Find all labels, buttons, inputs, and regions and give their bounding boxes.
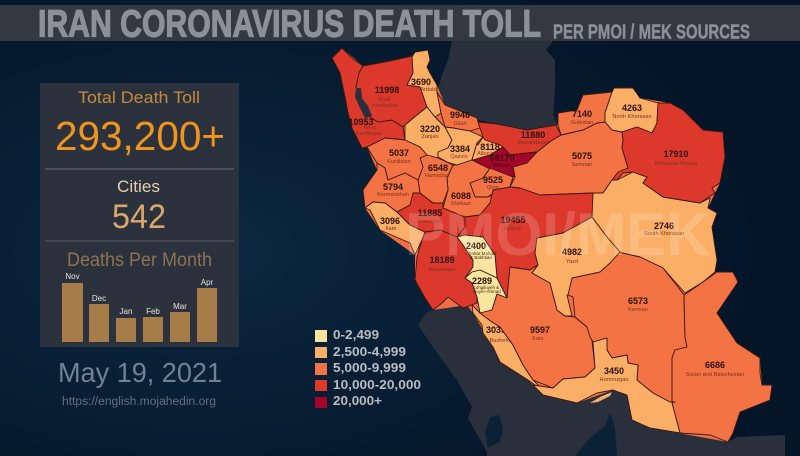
province: South Khorasan <box>592 172 717 293</box>
province: Alborz: Alborz <box>477 151 493 157</box>
province: Semnan: 5075 <box>572 151 592 161</box>
province: Gilan: 9946 <box>450 110 470 120</box>
legend item: 10,000-20,000: 10,000-20,000 <box>333 378 421 392</box>
legend item: 5,000-9,999: 5,000-9,999 <box>333 361 406 375</box>
province: Fars <box>480 265 595 388</box>
province: South Khorasan: 2746 <box>654 221 674 231</box>
Caspian Sea <box>437 41 558 130</box>
province: Khorasan Razavi <box>612 103 725 203</box>
province: Lorestan: Lorestan <box>419 219 441 225</box>
province: Kohgiluyeh and Boyer-Ahmad: Kohgiluyeh & <box>473 285 499 290</box>
province: Kohgiluyeh and Boyer-Ahmad: 2289 <box>472 276 492 286</box>
province: Ardabil: 3690 <box>411 77 431 87</box>
province: Hormozgan: Hormozgan <box>600 377 628 383</box>
province: Semnan <box>510 122 628 195</box>
bar chart: deaths per month: Feb <box>146 307 160 316</box>
province: Hormozgan <box>533 338 680 433</box>
province: Khorasan Razavi: Khorasan Razavi <box>655 161 697 167</box>
province: West Azerbaijan: 10953 <box>348 117 374 127</box>
province: Kerman: Kerman <box>628 307 648 313</box>
panel: statistics <box>40 83 239 347</box>
Persian Gulf and Gulf of Oman <box>418 305 785 456</box>
legend <box>315 328 421 408</box>
province: Lorestan: 11885 <box>418 208 442 218</box>
bar chart: deaths per month: Jan <box>120 307 132 316</box>
province: Kurdistan: 5037 <box>389 148 409 158</box>
province: Ilam: Ilam <box>386 226 397 232</box>
bar chart: deaths per month: Mar <box>173 302 187 311</box>
province: Qom <box>470 168 513 197</box>
province: Qom: Qom <box>487 185 499 191</box>
province: Isfahan: Isfahan <box>504 226 522 232</box>
province: Hamadan <box>418 155 453 203</box>
province: East Azerbaijan: East <box>379 97 391 103</box>
province: Golestan: Golestan <box>571 120 593 126</box>
province: Zanjan: Zanjan <box>421 134 439 140</box>
province: Ilam: 3096 <box>380 216 400 226</box>
province: East Azerbaijan: 11998 <box>375 85 399 95</box>
province: East Azerbaijan <box>356 56 427 127</box>
province: Kohgiluyeh and Boyer-Ahmad <box>465 270 507 313</box>
province: Isfahan: 19455 <box>500 215 526 225</box>
province: Mazandaran: Mazandaran <box>517 140 549 146</box>
province: West Azerbaijan: Azerbaijan <box>356 131 382 137</box>
province: Tehran <box>473 147 537 177</box>
province: Bushehr <box>472 305 545 392</box>
province: Isfahan <box>457 187 593 298</box>
province: Markazi: Markazi <box>451 201 471 207</box>
province: Gilan <box>437 92 480 131</box>
watermark: PMOI/MEK <box>405 201 710 268</box>
source url: https://english.mojahedin.org <box>62 396 216 408</box>
province: Khuzestan <box>415 230 477 310</box>
province: West Azerbaijan: West <box>364 125 377 131</box>
bar chart: deaths per month: Nov <box>65 272 80 281</box>
Qeshm island <box>590 392 612 403</box>
province: Khuzestan: 18189 <box>429 255 455 265</box>
province: North Khorasan: 4263 <box>622 103 642 113</box>
province: Zanjan <box>405 107 452 158</box>
province: Fars: 9597 <box>530 325 550 335</box>
province: Kerman: 6573 <box>628 296 648 306</box>
province: Ardabil <box>407 50 441 117</box>
province: Ardabil: Ardabil <box>420 87 438 93</box>
legend item: 0-2,499: 0-2,499 <box>333 328 379 342</box>
title banner <box>0 4 800 46</box>
heading: cities: Cities <box>117 177 160 196</box>
heading: total death toll: Total Death Toll <box>78 88 200 107</box>
province: Qazvin: 3384 <box>450 144 470 154</box>
province: Golestan: 7140 <box>572 109 592 119</box>
province: Khuzestan: Khuzestan <box>429 267 455 273</box>
province: Mazandaran <box>478 122 561 155</box>
province: Yazd <box>532 217 620 316</box>
province: Kerman <box>568 252 687 402</box>
province: North Khorasan: North Khorasan <box>612 114 652 120</box>
province: Chahar Mahaal and Bakhtiari: Chahar Mahaal <box>466 251 496 256</box>
province: Mazandaran: 11880 <box>521 130 545 140</box>
province: Lorestan <box>397 193 465 237</box>
province: Sistan and Baluchestan: Sistan and Baluchestan <box>686 372 744 378</box>
province: Alborz: 8118 <box>480 142 500 152</box>
country silhouette <box>332 48 772 442</box>
province: Sistan and Baluchestan <box>672 272 772 442</box>
province: Sistan and Baluchestan: 6686 <box>705 360 725 370</box>
title: IRAN CORONAVIRUS DEATH TOLL <box>38 4 541 46</box>
legend item: 20,000+: 20,000+ <box>333 394 382 408</box>
legend item: 2,500-4,999: 2,500-4,999 <box>333 345 406 359</box>
province: Gilan: Gilan <box>453 121 467 127</box>
province: Kermanshah <box>363 163 420 212</box>
province: Khorasan Razavi: 17910 <box>663 149 689 159</box>
province: Golestan <box>558 92 612 135</box>
province: Chahar Mahaal and Bakhtiari <box>457 235 497 278</box>
map of Iran <box>332 48 772 442</box>
province: Tehran: 68170 <box>489 153 515 163</box>
province: Kurdistan: Kurdistan <box>387 159 411 165</box>
province: Alborz <box>472 137 503 160</box>
province: Markazi: 6088 <box>451 191 471 201</box>
province: Qazvin: Qazvin <box>450 154 468 160</box>
cities figure: 542 <box>112 198 166 236</box>
bar chart: deaths per month <box>62 272 217 342</box>
province: North Khorasan <box>605 88 658 133</box>
Qatar <box>485 415 503 448</box>
province: Qazvin <box>438 127 483 165</box>
province: Semnan: Semnan <box>572 162 592 168</box>
province: Bushehr: Bushehr <box>490 338 511 344</box>
heading: deaths per month: Deaths Per Month <box>67 250 212 271</box>
province: East Azerbaijan: Azerbaijan <box>372 103 398 109</box>
province: Hamadan: Hamadan <box>425 173 449 179</box>
province: Hamadan: 6548 <box>428 163 448 173</box>
province: Markazi <box>443 160 493 217</box>
province: Kohgiluyeh and Boyer-Ahmad: Boyer-Ahmad <box>473 289 501 294</box>
bar chart: deaths per month: Apr <box>201 278 214 287</box>
province: Ilam <box>365 202 425 255</box>
province: South Khorasan: South Khorasan <box>644 231 684 237</box>
province: Kermanshah: 5794 <box>383 182 403 192</box>
Oman peninsula <box>575 413 617 456</box>
province: Tehran: Tehran <box>492 163 510 169</box>
province: Qom: 9525 <box>483 175 503 185</box>
province: Chahar Mahaal and Bakhtiari: & Bakhtiari <box>470 255 492 260</box>
province: Bushehr: 3039 <box>486 325 506 335</box>
bar chart: deaths per month: Dec <box>92 294 106 303</box>
province: West Azerbaijan <box>332 48 405 148</box>
province: Yazd: 4982 <box>562 247 582 257</box>
province: Fars: Fars <box>532 336 544 342</box>
province: Kermanshah: Kermanshah <box>377 192 409 198</box>
province: Chahar Mahaal and Bakhtiari: 2400 <box>466 241 486 251</box>
Lake Urmia <box>355 88 372 118</box>
province: Zanjan: 3220 <box>420 124 440 134</box>
total figure: 293,200+ <box>55 113 225 159</box>
province: Yazd: Yazd <box>566 259 578 265</box>
province: Hormozgan: 3450 <box>604 366 624 376</box>
date: May 19, 2021 <box>58 357 222 388</box>
province: Kurdistan <box>367 138 427 180</box>
